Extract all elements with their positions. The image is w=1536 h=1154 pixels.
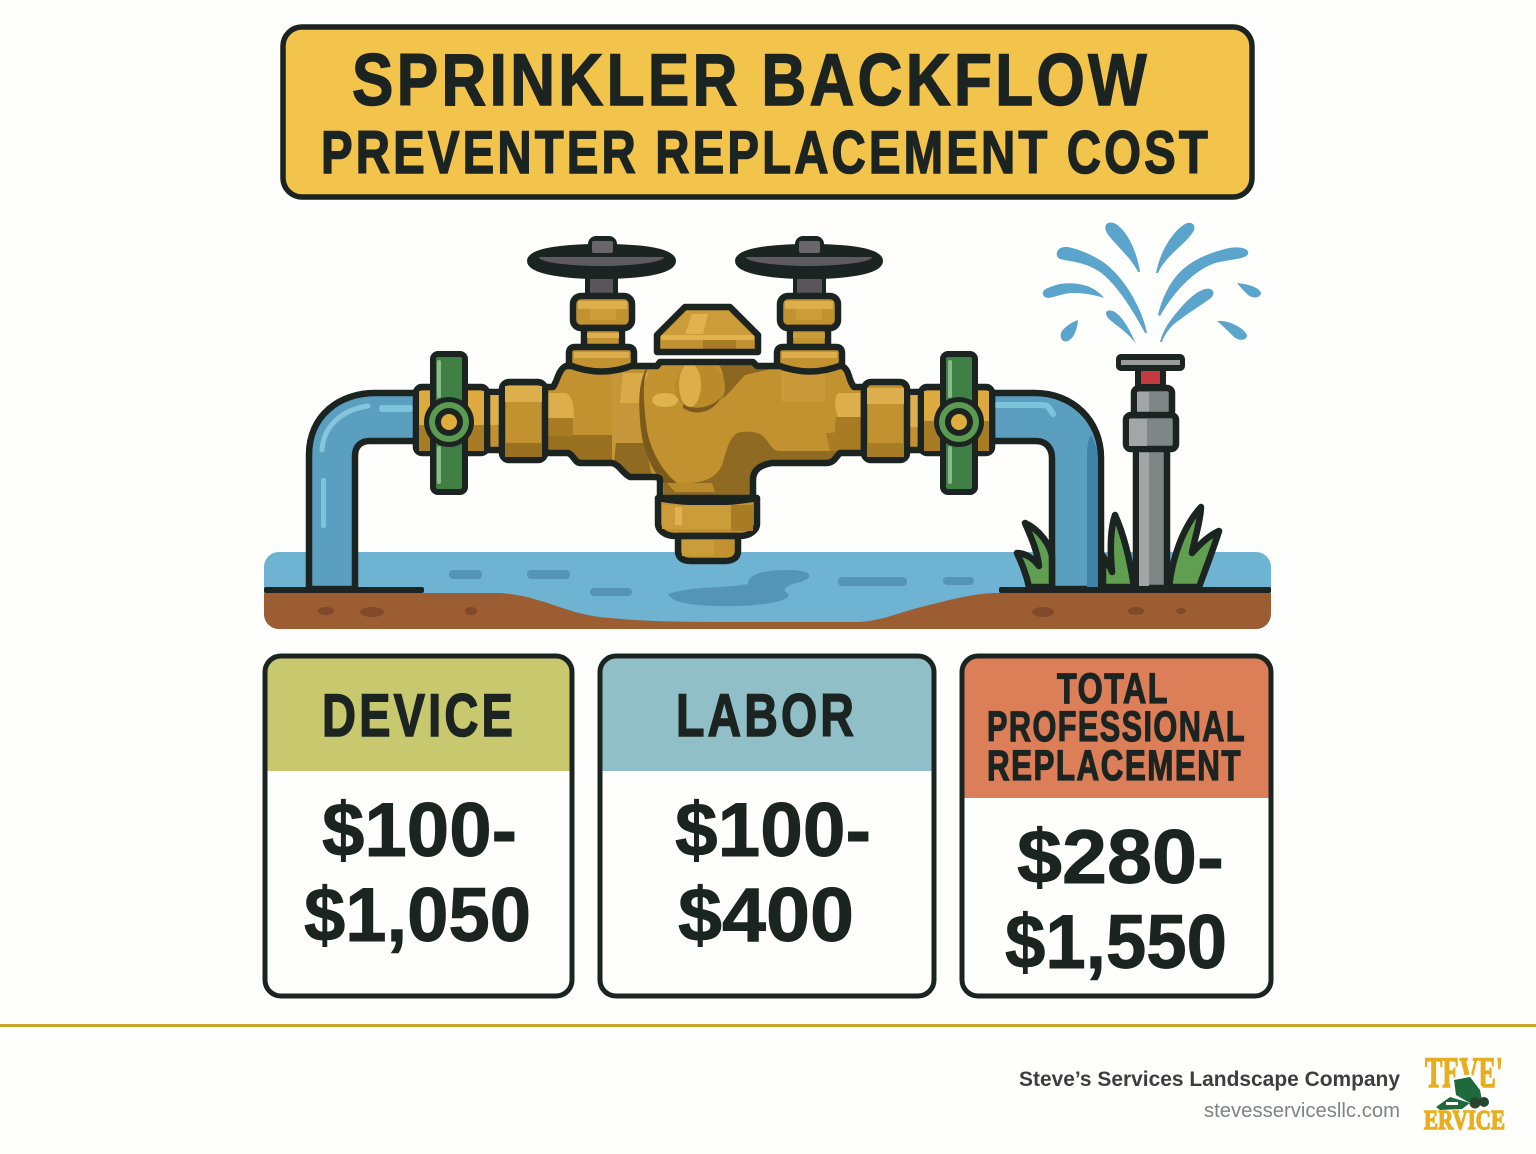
panel: total professional replacement cost: REPLACEMENT [987,742,1242,790]
title banner: PREVENTER REPLACEMENT COST [321,119,1211,186]
icon: left union fittings [416,382,545,460]
top hexagonal cap [657,307,758,352]
panel: total professional replacement cost: TOTAL [1057,665,1169,713]
footer website: stevesservicesllc.com [1204,1100,1400,1122]
illustration: ground with water and soil [264,552,1271,629]
logo: ERVICE [1424,1105,1505,1135]
panel: labor cost: LABOR [676,682,857,749]
skid steer loader [1436,1075,1489,1110]
icon: right union fittings [864,382,992,460]
panel: total professional replacement cost: $280- [1017,815,1224,900]
footer divider [0,1024,1536,1027]
device header [265,656,572,771]
panel: device cost: DEVICE [322,682,516,749]
panel: total professional replacement cost: $1,550 [1005,900,1227,985]
icon: brass valve body [543,307,864,561]
body outline [543,362,864,498]
footer company name: Steve’s Services Landscape Company [1019,1067,1400,1091]
icon: pop-up sprinkler head [1116,354,1185,588]
panel: total professional replacement cost [962,656,1271,996]
icon: right green valve handle [934,354,984,492]
panel: labor cost: $100- [675,788,871,873]
panel: total professional replacement cost: PROFESSIONAL [987,703,1246,751]
left black hand wheel [530,247,673,276]
icon: left green valve handle [424,354,474,492]
icon: right blue pipe [992,393,1101,589]
panel: labor cost: $400 [678,873,854,958]
title banner: SPRINKLER BACKFLOW [352,40,1150,121]
logo [1424,1050,1505,1135]
bottom nut [658,498,757,561]
panel: device cost: $1,050 [304,873,531,958]
panel: device cost: $100- [322,788,517,873]
icon: right shutoff stem [738,236,880,372]
icon: left blue pipe [309,393,418,589]
right black hand wheel [738,247,880,276]
labor header [600,656,934,771]
icon: water spray [1043,222,1261,344]
total header [962,656,1271,798]
panel: device cost [265,656,572,996]
icon: left shutoff stem [530,236,673,372]
brass shading [545,362,863,496]
panel: labor cost [600,656,934,996]
title banner [283,27,1252,197]
icon: grass tufts [1017,507,1219,587]
brass body casting [543,362,864,498]
